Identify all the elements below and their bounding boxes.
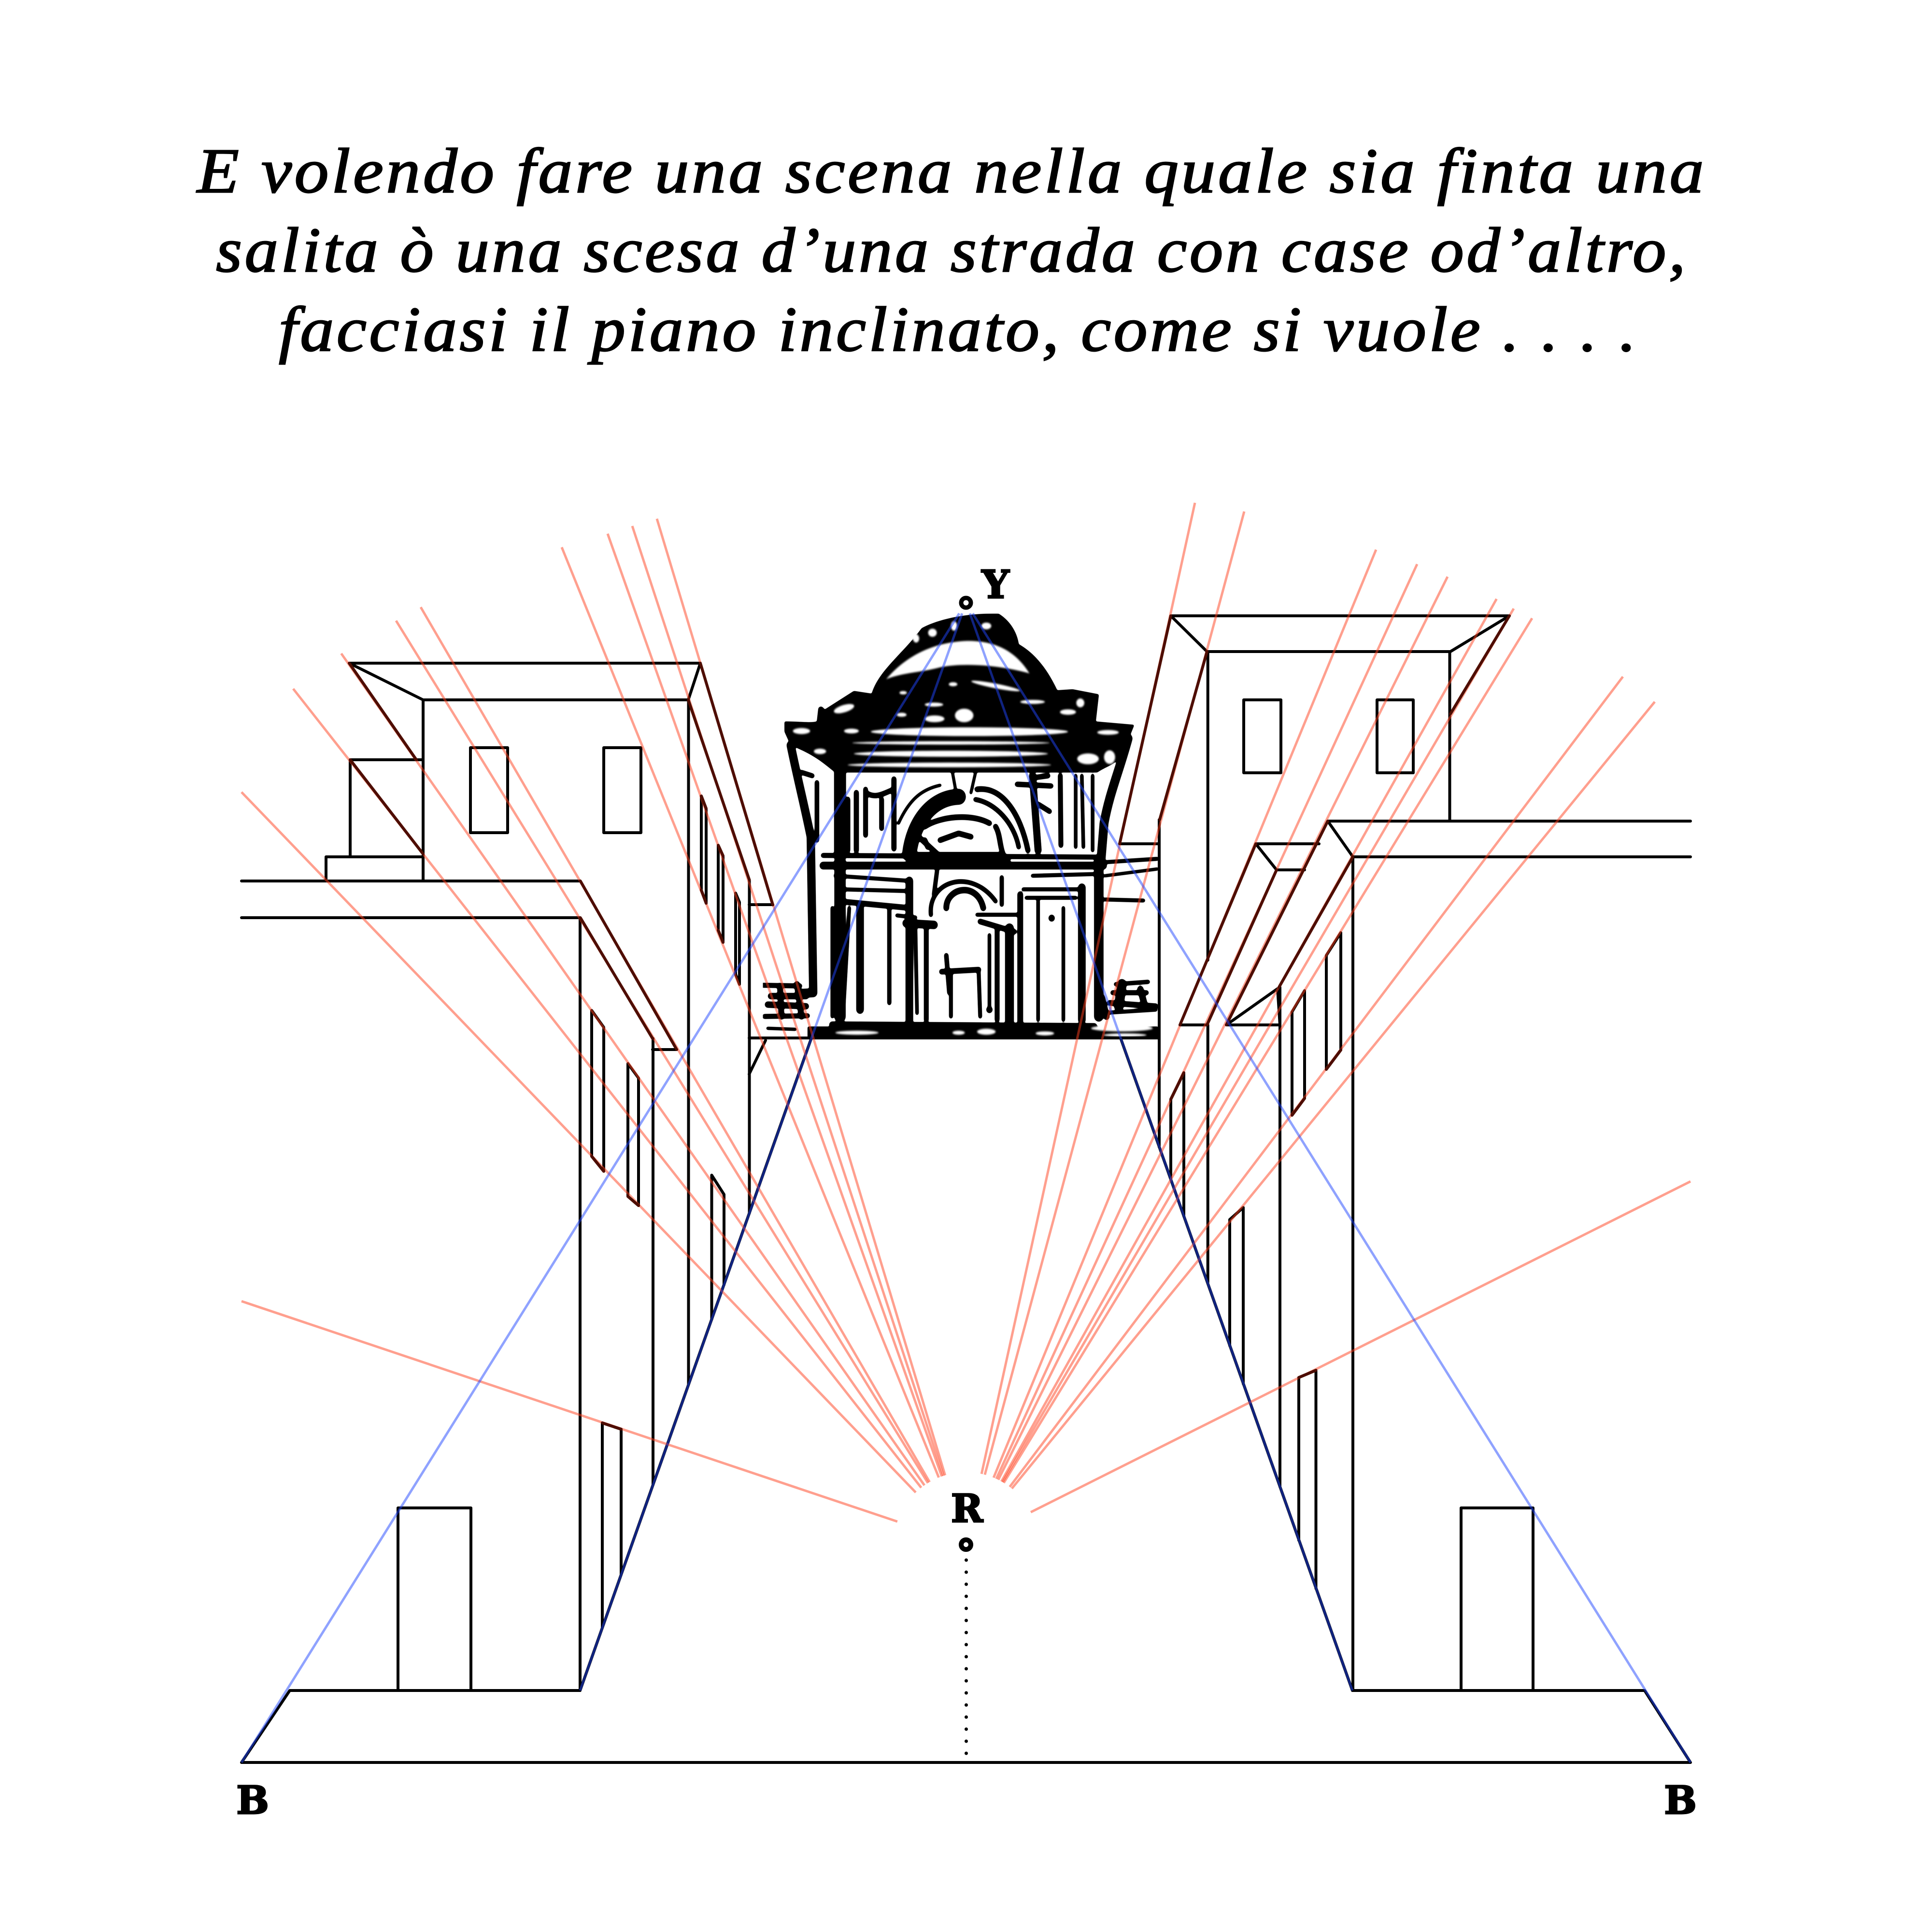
right front cornice band: [1226, 821, 1690, 1025]
left buildings: [242, 663, 773, 1690]
church facade at the end of the street: [763, 614, 1158, 1038]
right lower windows: [1171, 1073, 1316, 1589]
vanishing point Y: [961, 562, 1009, 608]
title: quotation in three lines: E volendo fare una scena nella quale sia finta una: [196, 135, 1706, 206]
title: quotation in three lines: [196, 135, 1706, 365]
left vertical wall edges: [580, 700, 750, 1690]
left lower windows: [602, 1175, 724, 1628]
left small annex: [326, 760, 423, 880]
red orthogonal rays converging on R: [242, 503, 1690, 1545]
blue lines converging on Y: [242, 613, 1690, 1762]
vanishing point Y: Y: [981, 562, 1009, 607]
left side windows: [592, 796, 739, 1206]
left front cornice band: [242, 881, 773, 1050]
right rear building windows: [1244, 700, 1413, 773]
left door: [398, 1508, 471, 1690]
right buildings: [1120, 616, 1690, 1690]
corner label B right: B: [1664, 1777, 1697, 1823]
title: quotation in three lines: salita ò una scesa d’una strada con case od’altro,: [216, 214, 1688, 285]
right door: [1461, 1508, 1533, 1690]
right protruding cornice: [1120, 844, 1319, 1025]
right rear building roof and wall: [1171, 616, 1509, 821]
ground plane and road edges: [242, 1038, 1690, 1762]
title: quotation in three lines: facciasi il piano inclinato, come si vuole . . . .: [279, 294, 1639, 365]
right side windows: [1292, 933, 1341, 1115]
vanishing point R with dotted axis: [951, 1486, 983, 1754]
dark receding building edges: [349, 616, 1509, 1429]
vanishing point R with dotted axis: R: [951, 1486, 983, 1531]
corner label B left: B: [236, 1777, 269, 1823]
left rear building roof and wall: [349, 663, 700, 880]
left rear building windows: [470, 748, 641, 833]
right vertical wall edges: [1159, 652, 1353, 1690]
